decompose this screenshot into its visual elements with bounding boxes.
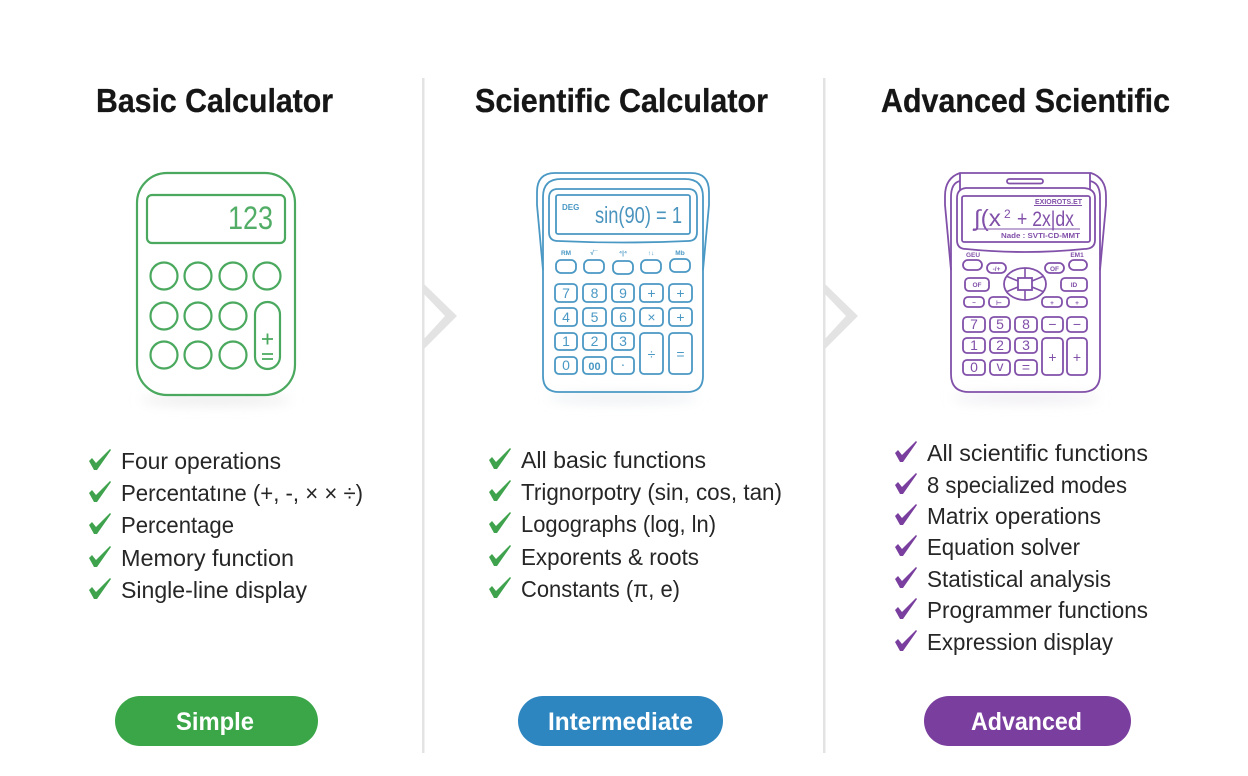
- heading: advanced scientific: Advanced Scientific: [881, 82, 1170, 119]
- icon: scientific calculator: ×: [647, 309, 656, 325]
- feature list: advanced: [895, 440, 1148, 655]
- icon: scientific calculator: √¯: [590, 249, 598, 257]
- icon: scientific calculator: 9: [619, 285, 627, 301]
- icon: scientific calculator: [537, 173, 709, 402]
- icon: advanced scientific calculator: EM1: [1070, 252, 1084, 259]
- icon: advanced scientific calculator: 5: [996, 316, 1004, 332]
- feature list: scientific: Logographs (log, ln): [521, 511, 716, 537]
- icon: advanced scientific calculator: ID: [1071, 282, 1078, 289]
- feature list: advanced: Equation solver: [927, 534, 1080, 560]
- feature list: basic: Percentage: [121, 512, 234, 538]
- icon: scientific calculator: Mb: [675, 250, 685, 257]
- divider with chevron: basic to scientific: [422, 78, 457, 753]
- icon: advanced scientific calculator: ~: [972, 300, 976, 307]
- feature list: advanced: All scientific functions: [927, 440, 1148, 466]
- panel: advanced scientific: [881, 82, 1170, 746]
- icon: advanced scientific calculator: ∫(x: [972, 205, 1002, 231]
- icon: advanced scientific calculator: 7: [970, 316, 978, 332]
- icon: scientific calculator: 7: [562, 285, 570, 301]
- icon: scientific calculator: ÷: [648, 346, 656, 362]
- icon: scientific calculator: ↑↓: [648, 250, 654, 257]
- icon: advanced scientific calculator: 1: [970, 337, 978, 353]
- icon: advanced scientific calculator: 2: [996, 337, 1004, 353]
- icon: advanced scientific calculator: 2: [1004, 207, 1011, 221]
- icon: scientific calculator: 1: [562, 333, 570, 349]
- feature list: advanced: 8 specialized modes: [927, 472, 1127, 498]
- icon: basic calculator: 123: [228, 200, 273, 236]
- icon: advanced scientific calculator: +: [1073, 349, 1081, 365]
- icon: advanced scientific calculator: -/+: [993, 266, 1001, 273]
- icon: advanced scientific calculator: GEU: [966, 252, 980, 259]
- icon: directional pad: [1004, 268, 1046, 300]
- feature list: basic: Single-line display: [121, 577, 307, 603]
- divider with chevron: scientific to advanced: [823, 78, 858, 753]
- icon: advanced scientific calculator: OF: [1050, 266, 1059, 273]
- feature list: scientific: [489, 447, 782, 602]
- icon: advanced scientific calculator: 8: [1022, 316, 1030, 332]
- icon: advanced scientific calculator: +: [1050, 300, 1054, 307]
- feature list: scientific: Constants (π, e): [521, 576, 680, 602]
- icon: scientific calculator: 3: [619, 333, 627, 349]
- heading: scientific calculator: Scientific Calculator: [475, 82, 768, 119]
- icon: scientific calculator: 00: [588, 361, 601, 373]
- panel: basic calculator: [89, 82, 363, 746]
- feature list: advanced: Programmer functions: [927, 597, 1148, 623]
- icon: scientific calculator: 2: [591, 333, 599, 349]
- icon: scientific calculator: 5: [591, 309, 599, 325]
- badge: advanced: Advanced: [971, 708, 1082, 736]
- badge: intermediate: Intermediate: [548, 708, 693, 736]
- icon: scientific calculator: 0: [562, 357, 570, 373]
- icon: scientific calculator: 6: [619, 309, 627, 325]
- icon: scientific calculator: ⁴|⁴: [619, 250, 627, 257]
- icon: advanced scientific calculator: [945, 173, 1106, 402]
- icon: advanced scientific calculator: 0: [970, 359, 978, 375]
- icon: scientific calculator: 4: [562, 309, 570, 325]
- icon: advanced scientific calculator: Nade : SVTI-CD-MMT: [1001, 233, 1081, 240]
- badge: simple: [115, 696, 318, 746]
- icon: advanced scientific calculator: 3: [1022, 337, 1030, 353]
- icon: scientific calculator: RM: [561, 250, 571, 257]
- badge: intermediate: [518, 696, 723, 746]
- icon: advanced scientific calculator: +: [1048, 349, 1057, 365]
- icon: scientific calculator: =: [676, 346, 685, 362]
- icon: scientific calculator: 8: [591, 285, 599, 301]
- feature list: scientific: All basic functions: [521, 447, 706, 473]
- feature list: basic: Four operations: [121, 448, 281, 474]
- icon: advanced scientific calculator: v: [996, 358, 1004, 374]
- icon: advanced scientific calculator: OF: [972, 282, 982, 289]
- icon: scientific calculator: +: [676, 309, 685, 325]
- panel: scientific calculator: [475, 82, 782, 746]
- icon: scientific calculator: ·: [621, 356, 625, 372]
- badge: simple: Simple: [176, 708, 254, 736]
- feature list: scientific: Trignorpotry (sin, cos, tan): [521, 479, 782, 505]
- icon: scientific calculator: DEG: [562, 203, 579, 212]
- icon: advanced scientific calculator: −: [1073, 316, 1081, 332]
- feature list: basic: [89, 448, 363, 603]
- icon: advanced scientific calculator: +: [1075, 300, 1079, 307]
- icon: advanced scientific calculator: ⊢: [996, 299, 1002, 307]
- feature list: advanced: Expression display: [927, 629, 1113, 655]
- icon: advanced scientific calculator: −: [1048, 316, 1057, 332]
- feature list: advanced: Statistical analysis: [927, 566, 1111, 592]
- feature list: basic: Memory function: [121, 545, 294, 571]
- feature list: scientific: Exporents & roots: [521, 544, 699, 570]
- icon: advanced scientific calculator: =: [1022, 359, 1030, 375]
- icon: scientific calculator: sin(90) = 1: [595, 202, 682, 228]
- icon: advanced scientific calculator: + 2x|dx: [1017, 208, 1074, 231]
- feature list: advanced: Matrix operations: [927, 503, 1101, 529]
- badge: advanced: [924, 696, 1131, 746]
- heading: basic calculator: Basic Calculator: [96, 82, 333, 119]
- icon: scientific calculator: +: [676, 285, 685, 301]
- icon: basic calculator: [137, 173, 295, 404]
- icon: scientific calculator: +: [647, 285, 656, 301]
- feature list: basic: Percentatıne (+, -, × × ÷): [121, 480, 363, 506]
- icon: advanced scientific calculator: EXIOROTS.ET: [1035, 199, 1083, 206]
